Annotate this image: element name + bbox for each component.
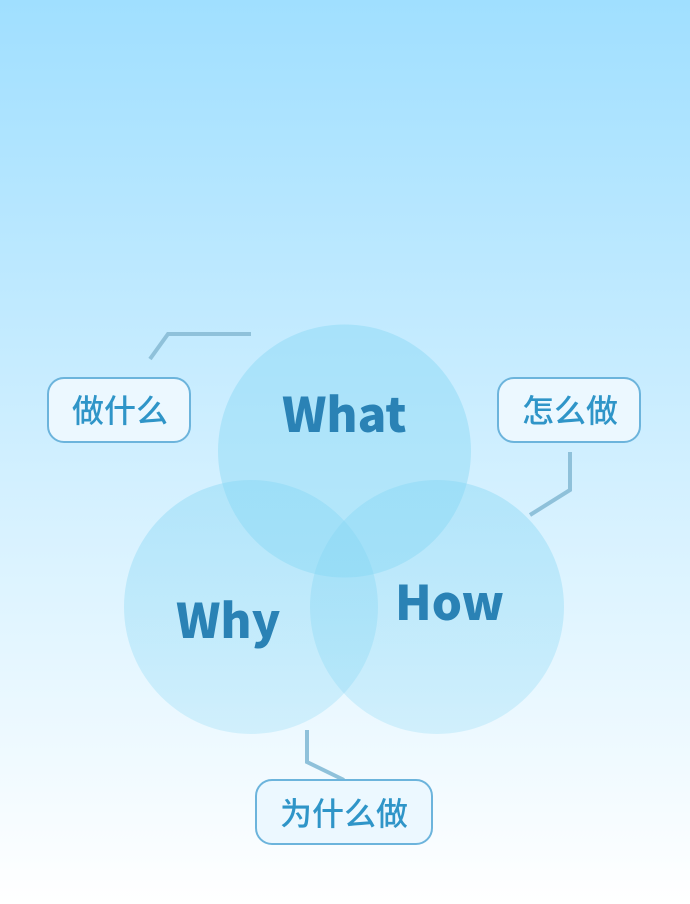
circle: what (218, 324, 471, 578)
callout: 怎么做: 怎么做 (522, 393, 618, 429)
callout: 做什么 (48, 378, 190, 442)
circle: why (124, 480, 378, 734)
connector: what to 做什么 (150, 334, 251, 359)
callout: 怎么做 (498, 378, 640, 442)
label: What: What (282, 377, 407, 446)
venn diagram circles (124, 324, 564, 734)
circle: how (310, 480, 564, 734)
connector: how to 怎么做 (530, 452, 570, 515)
label: Why: Why (176, 583, 281, 652)
connector: why to 为什么做 (307, 730, 344, 780)
callout: 为什么做 (256, 780, 432, 844)
label: How: How (395, 565, 504, 634)
callout: 为什么做: 为什么做 (280, 796, 408, 832)
callout: 做什么: 做什么 (72, 393, 168, 429)
